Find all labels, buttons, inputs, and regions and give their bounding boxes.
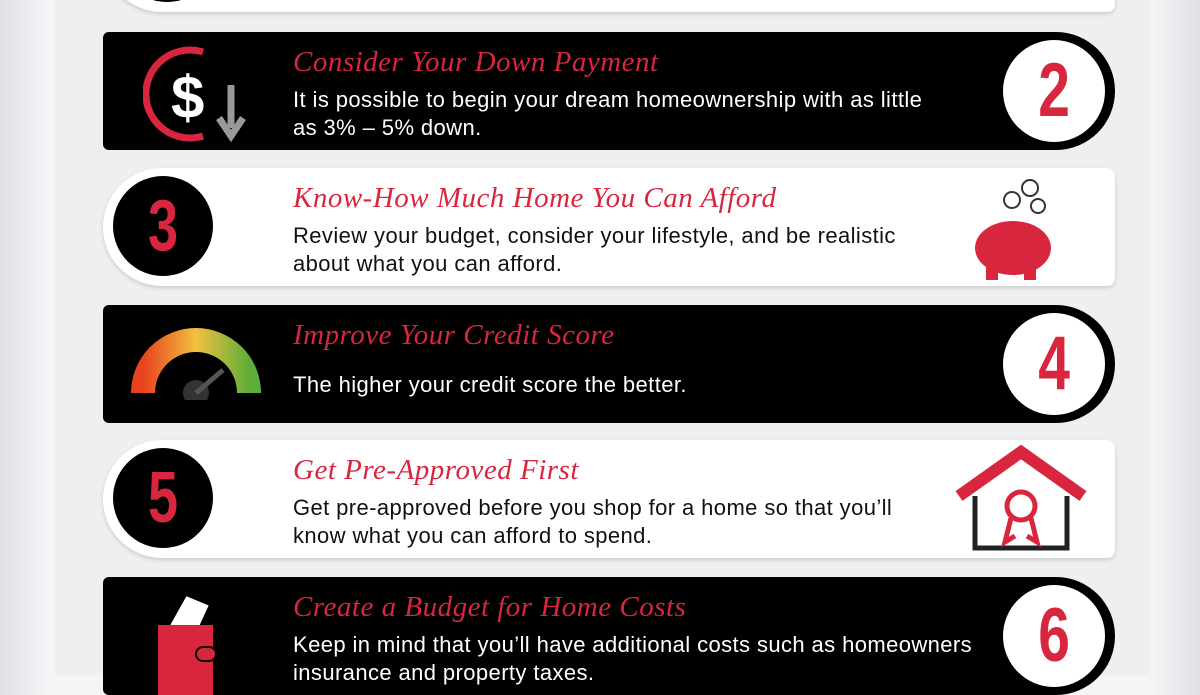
heading: Consider Your Down Payment bbox=[293, 46, 659, 78]
number 4 bbox=[1003, 313, 1105, 415]
row 5: pre-approved: Get pre-approved before you shop for a home so that you’ll bbox=[293, 495, 892, 520]
row 2: down payment bbox=[103, 32, 1115, 150]
number 6 bbox=[1003, 585, 1105, 687]
row 3: afford bbox=[103, 168, 1115, 286]
icon: dollar down bbox=[143, 46, 246, 142]
number 6: 6 bbox=[1038, 593, 1070, 678]
row 5: pre-approved: know what you can afford to spend. bbox=[293, 523, 652, 548]
row 3: afford: about what you can afford. bbox=[293, 251, 562, 276]
row 4: credit bbox=[103, 305, 1115, 423]
number 5: 5 bbox=[148, 458, 178, 538]
number 5 bbox=[113, 448, 213, 548]
row 6: budget bbox=[103, 577, 1115, 695]
row 5: pre-approved: Get Pre-Approved First bbox=[293, 454, 579, 486]
number 2 bbox=[1003, 40, 1105, 142]
icon: piggy bank bbox=[975, 179, 1051, 280]
icon: house bbox=[956, 444, 1086, 550]
number 2: 2 bbox=[1038, 48, 1070, 133]
icon: gauge bbox=[131, 328, 261, 400]
row 6: budget: Create a Budget for Home Costs bbox=[293, 591, 686, 623]
number 3 bbox=[113, 176, 213, 276]
number 4: 4 bbox=[1038, 321, 1070, 406]
row 6: budget: insurance and property taxes. bbox=[293, 660, 594, 685]
row 1 (partial) bbox=[103, 0, 1115, 12]
icon: dollar down: $ bbox=[171, 64, 204, 131]
row 3: afford: Know-How Much Home You Can Afford bbox=[293, 182, 776, 214]
icon: wallet bbox=[158, 596, 215, 695]
row 5: pre-approved bbox=[103, 440, 1115, 558]
number 3: 3 bbox=[148, 186, 178, 266]
text: as 3% – 5% down. bbox=[293, 115, 482, 140]
row 6: budget: Keep in mind that you’ll have additional costs such as homeowners bbox=[293, 632, 972, 657]
row 4: credit: Improve Your Credit Score bbox=[293, 319, 615, 351]
text: It is possible to begin your dream homeownership with as little bbox=[293, 87, 922, 112]
row 4: credit: The higher your credit score the better. bbox=[293, 372, 687, 397]
row 3: afford: Review your budget, consider your lifestyle, and be realistic bbox=[293, 223, 896, 248]
text bbox=[293, 87, 922, 140]
